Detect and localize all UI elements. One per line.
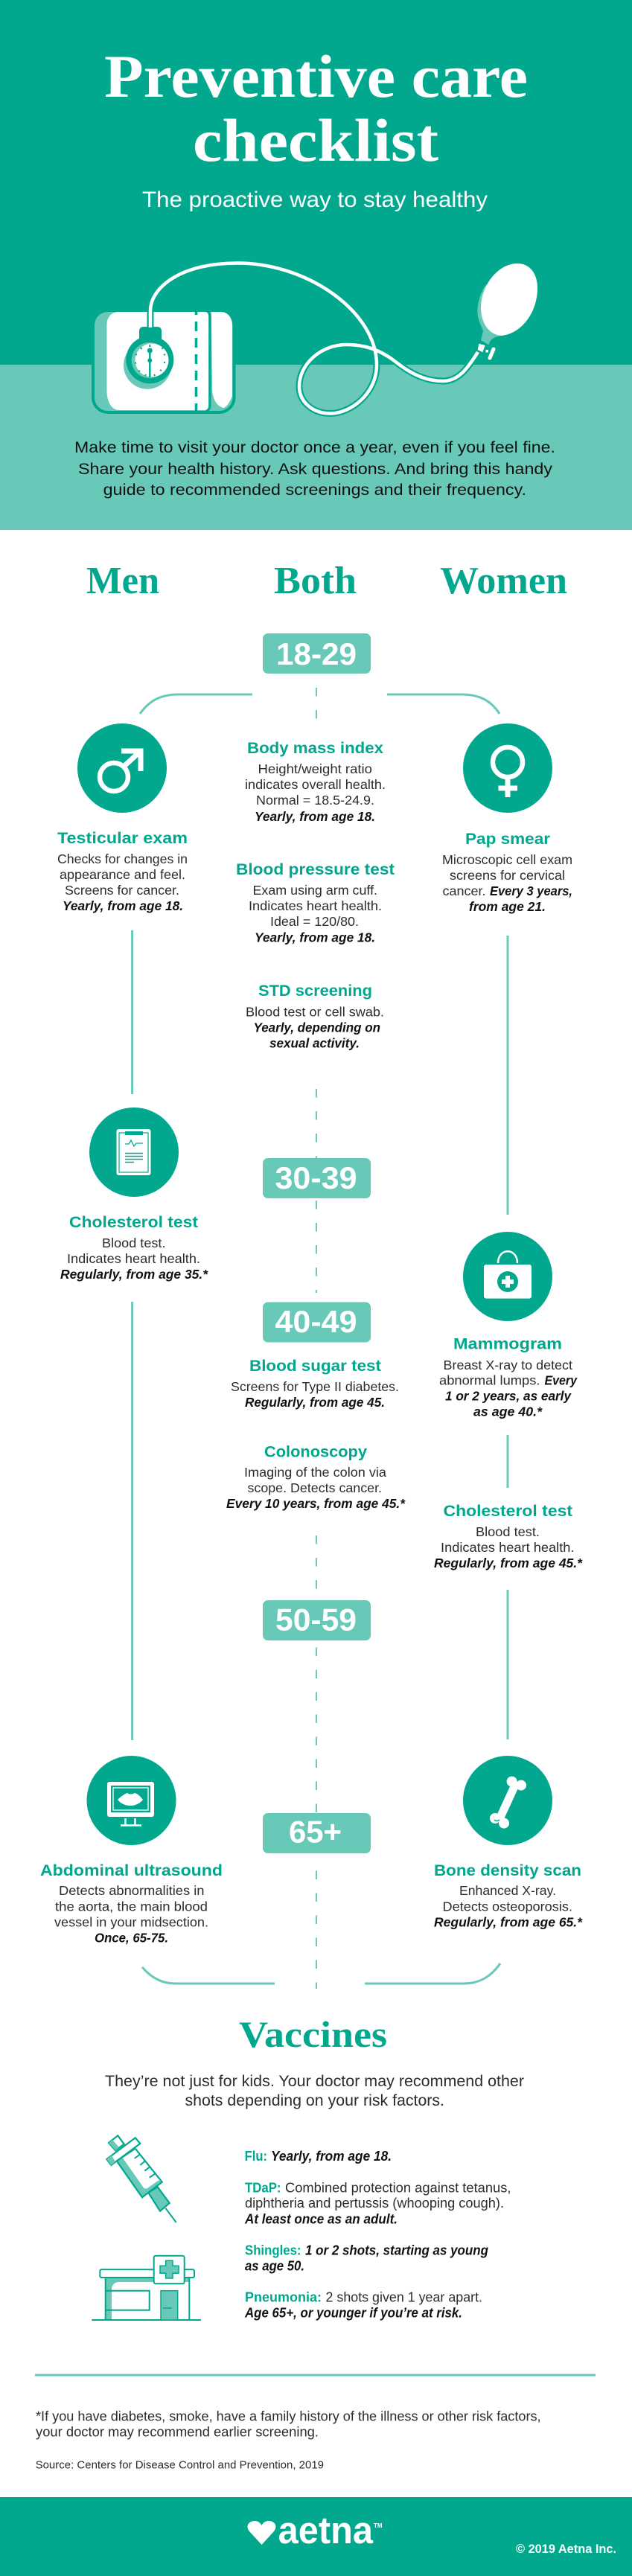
vaccine: pneumonia: 2 shots given 1 year apart. [326, 2290, 482, 2305]
screening: cholesterol test (men): Indicates heart health. [67, 1251, 200, 1266]
screening: blood pressure test: Blood pressure test [236, 861, 395, 878]
vaccine: TDaP: TDaP: [245, 2181, 281, 2196]
screening: abdominal ultrasound: Once, 65-75. [95, 1931, 168, 1946]
screening: blood pressure test: Exam using arm cuff. [253, 883, 377, 898]
footnote: your doctor may recommend earlier screening. [36, 2424, 319, 2439]
screening: blood sugar test: Regularly, from age 45. [245, 1395, 385, 1410]
screening: blood sugar test [231, 1358, 399, 1410]
screening: cholesterol test (men): Cholesterol test [69, 1214, 198, 1231]
title: checklist [193, 106, 438, 174]
logo: aetna: TM [374, 2522, 383, 2529]
screening: blood pressure test: Yearly, from age 18. [255, 930, 375, 945]
intro text [74, 438, 555, 499]
source: Source: Centers for Disease Control and Prevention, 2019 [36, 2458, 324, 2471]
age badge 40-49: 40-49 [275, 1304, 357, 1339]
age badge 40-49 [263, 1303, 371, 1343]
intro text: guide to recommended screenings and their frequency. [103, 481, 526, 499]
screening: pap smear: screens for cervical [450, 868, 565, 883]
screening: abdominal ultrasound: vessel in your midsection. [54, 1914, 208, 1929]
screening: testicular exam: Yearly, from age 18. [63, 898, 183, 913]
vaccines intro: shots depending on your risk factors. [185, 2092, 444, 2109]
screening: mammogram: Mammogram [453, 1335, 562, 1353]
screening: cholesterol test (men): Blood test. [102, 1236, 165, 1250]
screening: STD screening: Yearly, depending on [253, 1020, 380, 1035]
screening: pap smear: Pap smear [465, 831, 550, 848]
screening: colonoscopy: Imaging of the colon via [244, 1465, 386, 1480]
intro text: Share your health history. Ask questions. And bring this handy [78, 460, 552, 478]
vaccine: pneumonia [244, 2290, 482, 2321]
column headings: Women [440, 560, 567, 602]
footnote [36, 2409, 541, 2439]
screening: body mass index: Height/weight ratio [258, 761, 372, 776]
screening: bone density scan: Regularly, from age 65.* [434, 1914, 583, 1929]
screening: STD screening: sexual activity. [269, 1036, 360, 1051]
screening: testicular exam: Testicular exam [57, 830, 188, 847]
screening: cholesterol test (women) [434, 1503, 583, 1570]
vaccines heading: Vaccines [239, 2013, 387, 2055]
screening: bone density scan: Detects osteoporosis. [442, 1899, 572, 1914]
screening: blood pressure test: Indicates heart health. [249, 898, 382, 913]
title: Preventive care [104, 42, 528, 110]
vaccine: shingles: 1 or 2 shots, starting as young [305, 2243, 488, 2258]
screening: mammogram: abnormal lumps. [439, 1373, 540, 1388]
age badge 30-39 [263, 1158, 371, 1198]
age badge 30-39: 30-39 [275, 1160, 357, 1195]
age badge 50-59: 50-59 [275, 1602, 357, 1637]
screening: testicular exam: Checks for changes in [57, 851, 188, 866]
screening: body mass index: indicates overall health. [245, 777, 386, 792]
screening: mammogram: Breast X-ray to detect [444, 1358, 572, 1372]
vaccine: TDaP: Combined protection against tetanus, [285, 2181, 511, 2196]
screening: pap smear [442, 831, 572, 914]
age badge 50-59 [263, 1600, 371, 1640]
icon: pharmacy [92, 2256, 201, 2320]
column headings: Men [86, 560, 159, 602]
screening: bone density scan: Bone density scan [434, 1862, 581, 1879]
icon: medical kit [463, 1232, 552, 1321]
age badge 65+ [263, 1813, 371, 1853]
vaccine: TDaP: At least once as an adult. [244, 2212, 398, 2227]
screening: mammogram: Every [545, 1373, 578, 1388]
screening: cholesterol test (men): Regularly, from age 35.* [60, 1267, 208, 1282]
intro text: Make time to visit your doctor once a year, even if you feel fine. [74, 438, 555, 456]
screening: cholesterol test (women): Regularly, from age 45.* [434, 1556, 583, 1570]
icon: clipboard [89, 1108, 179, 1197]
vaccine: flu: Flu: [245, 2149, 267, 2164]
vaccines intro [105, 2073, 524, 2109]
vaccine: flu: Yearly, from age 18. [271, 2149, 392, 2164]
vaccines intro: They’re not just for kids. Your doctor may recommend other [105, 2073, 524, 2090]
screening: STD screening: Blood test or cell swab. [246, 1005, 384, 1020]
screening: bone density scan: Enhanced X-ray. [459, 1883, 556, 1898]
screening: pap smear: Every 3 years, [490, 883, 572, 898]
screening: cholesterol test (women): Blood test. [476, 1524, 540, 1539]
screening: cholesterol test (women): Cholesterol test [444, 1503, 572, 1520]
illustration: pump bulb [477, 263, 537, 358]
illustration: tube [150, 263, 478, 414]
screening: abdominal ultrasound: Abdominal ultrasound [40, 1862, 223, 1879]
copyright: © 2019 Aetna Inc. [516, 2542, 616, 2556]
screening: testicular exam: appearance and feel. [60, 867, 185, 882]
screening: pap smear: from age 21. [469, 899, 546, 914]
vaccine: shingles: Shingles: [245, 2243, 301, 2258]
screening: mammogram: 1 or 2 years, as early [445, 1389, 572, 1404]
title [104, 42, 528, 174]
screening: blood pressure test [236, 861, 395, 945]
screening: STD screening [246, 982, 384, 1051]
age badge 18-29 [263, 633, 371, 674]
vaccine: TDaP: diphtheria and pertussis (whooping cough). [245, 2196, 504, 2211]
timeline connectors [133, 688, 508, 1989]
screening: testicular exam [57, 830, 188, 913]
screening: colonoscopy: scope. Detects cancer. [247, 1480, 382, 1495]
screening: abdominal ultrasound [40, 1862, 223, 1946]
screening: colonoscopy: Every 10 years, from age 45.* [226, 1496, 406, 1511]
screening: bone density scan [434, 1862, 583, 1929]
screening: mammogram [439, 1335, 578, 1419]
icon: bone [463, 1756, 552, 1845]
screening: abdominal ultrasound: Detects abnormalities in [59, 1883, 204, 1898]
vaccine: pneumonia: Pneumonia: [245, 2290, 322, 2305]
footer band [0, 2497, 632, 2576]
screening: colonoscopy: Colonoscopy [264, 1444, 367, 1460]
subtitle: The proactive way to stay healthy [142, 188, 488, 212]
footnote: *If you have diabetes, smoke, have a family history of the illness or other risk factors, [36, 2409, 541, 2423]
icon: ultrasound monitor [86, 1756, 176, 1845]
vaccine: pneumonia: Age 65+, or younger if you’re at risk. [244, 2306, 462, 2321]
screening: abdominal ultrasound: the aorta, the main blood [55, 1899, 208, 1914]
screening: body mass index: Normal = 18.5-24.9. [256, 793, 374, 808]
screening: body mass index: Yearly, from age 18. [255, 809, 375, 824]
screening: cholesterol test (men) [60, 1214, 208, 1282]
header panel [0, 0, 632, 530]
screening: colonoscopy [226, 1444, 406, 1511]
icon: male symbol [77, 723, 167, 813]
screening: body mass index [245, 740, 386, 824]
screening: mammogram: as age 40.* [473, 1404, 543, 1419]
age badge 18-29: 18-29 [276, 636, 357, 671]
screening: body mass index: Body mass index [247, 740, 383, 757]
screening: blood sugar test: Blood sugar test [249, 1358, 381, 1375]
illustration: blood pressure cuff [93, 310, 234, 412]
screening: pap smear: Microscopic cell exam [442, 852, 572, 867]
column headings: Both [274, 560, 357, 602]
vaccine: shingles [245, 2243, 488, 2274]
screening: blood sugar test: Screens for Type II diabetes. [231, 1379, 399, 1394]
vaccine: TDaP [244, 2181, 511, 2227]
column headings [86, 560, 567, 602]
age badge 65+: 65+ [289, 1815, 342, 1850]
icon: female symbol [463, 723, 552, 813]
screening: blood pressure test: Ideal = 120/80. [270, 914, 359, 929]
screening: testicular exam: Screens for cancer. [65, 883, 179, 898]
vaccine: shingles: as age 50. [245, 2259, 304, 2274]
screening: pap smear: cancer. [442, 883, 485, 898]
icon: syringe [106, 2135, 176, 2222]
logo: aetna: aetna [278, 2509, 374, 2551]
screening: STD screening: STD screening [258, 982, 372, 1000]
screening: cholesterol test (women): Indicates heart health. [441, 1540, 575, 1555]
